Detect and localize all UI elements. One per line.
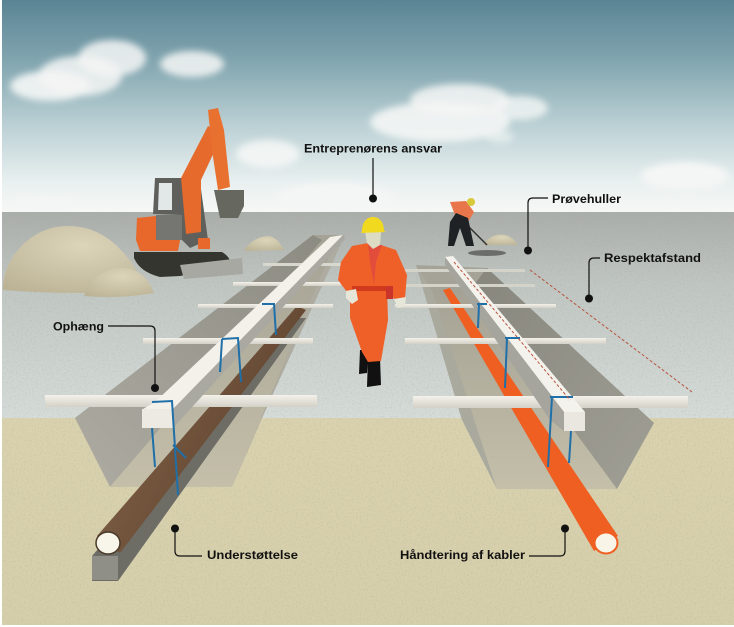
- label: Entreprenørens ansvar: Entreprenørens ansvar: [304, 142, 442, 156]
- trench right wall: [470, 268, 654, 489]
- excavator tracks: [134, 252, 230, 277]
- sky: [2, 0, 734, 213]
- counterweight right: [198, 238, 210, 249]
- label: Respektafstand: Respektafstand: [604, 251, 701, 265]
- label: Entreprenørens ansvar: [304, 142, 442, 202]
- left trench: [75, 235, 345, 487]
- label: Ophæng: Ophæng: [53, 320, 104, 334]
- clouds: [10, 40, 729, 211]
- blue straps: [152, 304, 573, 495]
- trench opening: [75, 235, 345, 418]
- label: Ophæng: [53, 320, 159, 392]
- label: Prøvehuller: Prøvehuller: [552, 192, 621, 206]
- excavator cab: [153, 178, 208, 248]
- shirt: [450, 201, 474, 222]
- foreground worker: [338, 217, 407, 387]
- hard hat: [467, 198, 475, 206]
- excavator bucket: [214, 190, 244, 218]
- sand foreground: [2, 418, 734, 625]
- cross planks right: [395, 269, 688, 408]
- red dashed line: respektafstand: [454, 262, 692, 400]
- gravel ground: [2, 212, 734, 420]
- cross planks left: [45, 263, 345, 407]
- mounds of soil: [3, 226, 284, 297]
- left hanging beam: [142, 235, 345, 428]
- trench left wall: [75, 235, 322, 487]
- label: Håndtering af kabler: Håndtering af kabler: [400, 548, 525, 562]
- belt: [352, 286, 388, 291]
- cab windows: [158, 183, 172, 210]
- right hanging beam: [445, 256, 585, 431]
- label: Håndtering af kabler: [400, 524, 569, 562]
- orange cable: [443, 288, 618, 554]
- trench right wall: [232, 235, 345, 487]
- collar: [368, 244, 382, 285]
- trench floor: [432, 290, 617, 489]
- trench floor: [110, 240, 336, 487]
- excavator boom: [181, 126, 222, 234]
- excavator body: [136, 216, 180, 251]
- brown cable: [96, 306, 306, 554]
- excavator engine cover: [156, 215, 184, 240]
- suit: [338, 243, 407, 362]
- excavator blade: [180, 258, 243, 279]
- label: Prøvehuller: [524, 192, 621, 254]
- right trench: [416, 265, 654, 489]
- shovel: [462, 220, 487, 245]
- label: Understøttelse: [171, 524, 298, 562]
- legs: [448, 213, 474, 246]
- concrete support beam: [92, 318, 306, 581]
- pouch: [386, 286, 393, 299]
- worker digging test holes: [448, 198, 518, 256]
- excavator stick: [208, 108, 230, 190]
- excavator: [134, 108, 244, 279]
- ground texture: [2, 212, 734, 625]
- trench left wall: [416, 265, 497, 489]
- label: Understøttelse: Understøttelse: [207, 548, 298, 562]
- mound by hole: [483, 234, 518, 245]
- label: Respektafstand: [585, 251, 701, 302]
- gloves: [346, 289, 406, 308]
- hard hat: [361, 217, 386, 233]
- boots: [359, 350, 381, 387]
- face: [365, 232, 381, 249]
- test hole: [468, 250, 506, 256]
- trench opening: [416, 265, 654, 423]
